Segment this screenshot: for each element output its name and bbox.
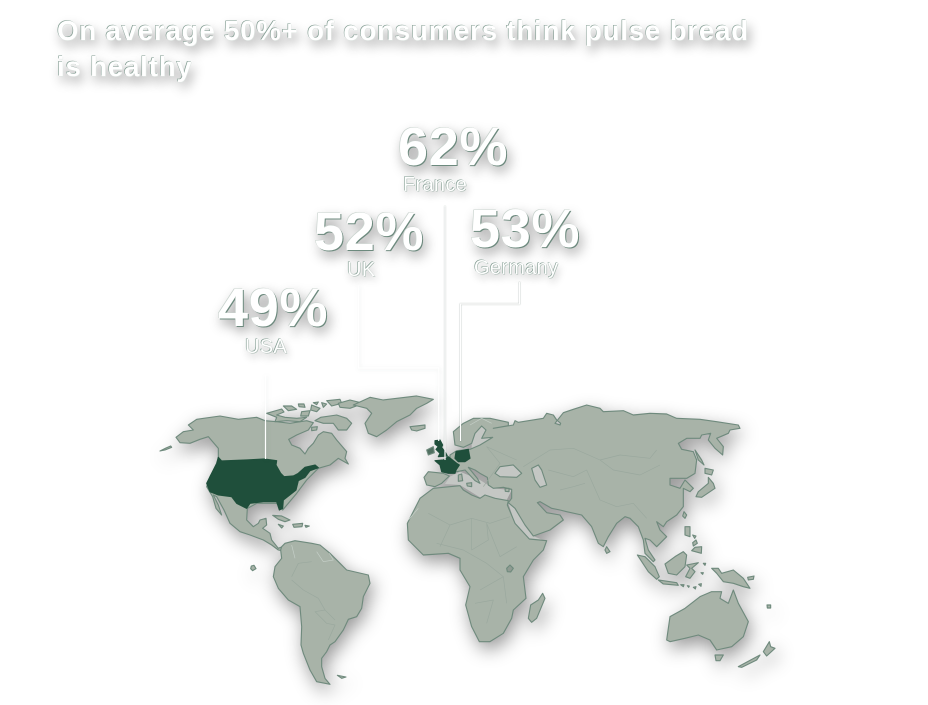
USA <box>207 457 318 510</box>
value: 52% <box>314 202 424 262</box>
Eurasia and Africa <box>407 405 754 642</box>
label: UK <box>347 259 375 281</box>
stat: France 62% <box>395 117 516 198</box>
label: Germany <box>474 257 558 279</box>
stat: Germany 53% <box>468 199 588 282</box>
value: 62% <box>398 117 508 177</box>
Lake Victoria <box>507 565 513 572</box>
title: is healthy <box>57 51 193 82</box>
inland seas <box>445 426 547 542</box>
label: France <box>403 174 467 196</box>
Australia and New Zealand <box>667 590 775 667</box>
line: Germany <box>460 282 520 441</box>
label: USA <box>245 336 287 358</box>
line: France <box>444 206 446 460</box>
South America <box>251 541 545 684</box>
stat: USA 49% <box>216 278 336 360</box>
title: On average 50%+ of consumers think pulse bread <box>57 15 749 46</box>
Black Sea and Caspian Sea <box>495 465 547 487</box>
line: USA <box>264 375 266 459</box>
title <box>55 15 756 92</box>
UK, France and Germany <box>427 440 470 473</box>
value: 53% <box>470 199 580 259</box>
highlighted countries <box>207 440 470 510</box>
stat: UK 52% <box>312 202 432 282</box>
line: UK <box>358 285 439 441</box>
North and Central America <box>160 396 433 552</box>
value: 49% <box>218 278 328 338</box>
